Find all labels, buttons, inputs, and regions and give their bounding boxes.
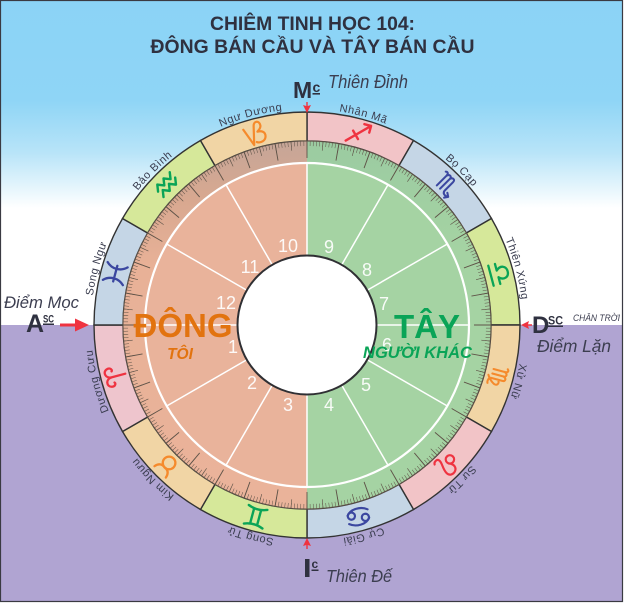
icon: Pisces: [103, 262, 128, 285]
heading: TÂY: TÂY: [394, 308, 460, 345]
western hemisphere ring: [307, 141, 491, 509]
IC marker: [305, 557, 318, 577]
zodiac name labels: Cự Giải: [344, 528, 384, 546]
label: Thiên Đế: Thiên Đế: [326, 566, 393, 586]
zodiac name labels: Song Ngư: [86, 242, 106, 296]
icon: Taurus: [154, 453, 179, 478]
zodiac name labels: [86, 104, 528, 546]
icon: Libra: [488, 261, 510, 286]
IC marker: c: [312, 557, 318, 571]
house numbers: [216, 236, 392, 415]
eastern hemisphere ring: [123, 141, 307, 509]
zodiac name labels: Bảo Bình: [132, 152, 172, 190]
house numbers: 5: [361, 375, 371, 395]
label: Chân trời: CHÂN TRỜI: [573, 313, 620, 323]
arrow: to DSC: [521, 321, 532, 329]
icon: Gemini: [244, 505, 267, 528]
zodiac band: twelve coloured sectors: [94, 112, 520, 538]
label: Điểm Mọc: Điểm Mọc: [4, 293, 79, 312]
zodiac name labels: Song Tử: [228, 527, 273, 546]
arrow: to MC: [303, 102, 311, 113]
zodiac wheel: [86, 104, 528, 546]
house numbers: 9: [324, 237, 334, 257]
degree tick marks: [123, 141, 491, 509]
title: [150, 13, 474, 58]
icon: Virgo: [486, 365, 509, 387]
MC marker: M: [293, 77, 312, 103]
house dividers: [145, 163, 469, 487]
ASC marker: A: [26, 310, 44, 338]
western hemisphere disk: [307, 163, 469, 487]
house numbers: 12: [216, 293, 236, 313]
background: lower hemisphere below the horizon: [0, 325, 623, 602]
arrow: to IC: [303, 538, 311, 549]
house numbers: 1: [228, 337, 238, 357]
DSC marker: [532, 312, 563, 339]
house numbers: 10: [278, 236, 298, 256]
house numbers: 4: [324, 395, 334, 415]
label: Điểm Lặn: Điểm Lặn: [537, 336, 611, 356]
icon: Aquarius: [154, 172, 179, 197]
zodiac name labels: Dương Cưu: [86, 350, 108, 414]
house numbers: 2: [247, 373, 257, 393]
icon: Capricorn: [242, 120, 267, 147]
MC marker: [293, 77, 320, 103]
MC marker: c: [312, 79, 320, 95]
white house circle: [145, 163, 469, 487]
title: CHIÊM TINH HỌC 104:: [210, 13, 415, 35]
icon: Sagittarius: [346, 121, 371, 146]
title: ĐÔNG BÁN CẦU VÀ TÂY BÁN CẦU: [150, 36, 474, 58]
icon: Leo: [433, 450, 462, 478]
eastern hemisphere disk: [145, 163, 307, 487]
icon: Cancer: [346, 506, 371, 528]
ASC marker: [26, 310, 54, 338]
zodiac name labels: Nhân Mã: [340, 104, 388, 124]
zodiac name labels: Xử Nữ: [511, 364, 527, 399]
heading: ĐÔNG: ĐÔNG: [134, 306, 232, 344]
house numbers: 11: [241, 257, 259, 277]
zodiac name labels: Kim Ngưu: [132, 458, 174, 501]
house numbers: 3: [283, 395, 293, 415]
subheading: TÔI: TÔI: [167, 345, 194, 363]
arrow: to ASC: [60, 318, 89, 332]
background: sky above the horizon: [0, 0, 623, 325]
DSC marker: SC: [548, 314, 563, 328]
icon: Aries: [104, 365, 128, 388]
central hub: [238, 256, 376, 394]
subheading: NGƯỜI KHÁC: NGƯỜI KHÁC: [363, 343, 473, 362]
zodiac name labels: Sư Tử: [449, 466, 476, 494]
house numbers: 6: [382, 335, 392, 355]
zodiac name labels: Ngư Dương: [218, 104, 282, 126]
ASC marker: SC: [43, 314, 54, 326]
house numbers: 7: [379, 294, 389, 314]
label: Thiên Đỉnh: Thiên Đỉnh: [328, 72, 408, 92]
icon: Scorpio: [432, 171, 460, 199]
house numbers: 8: [362, 260, 372, 280]
zodiac name labels: Thiên Xứng: [506, 236, 528, 299]
DSC marker: D: [532, 312, 549, 339]
zodiac name labels: Bọ Cạp: [446, 154, 476, 186]
